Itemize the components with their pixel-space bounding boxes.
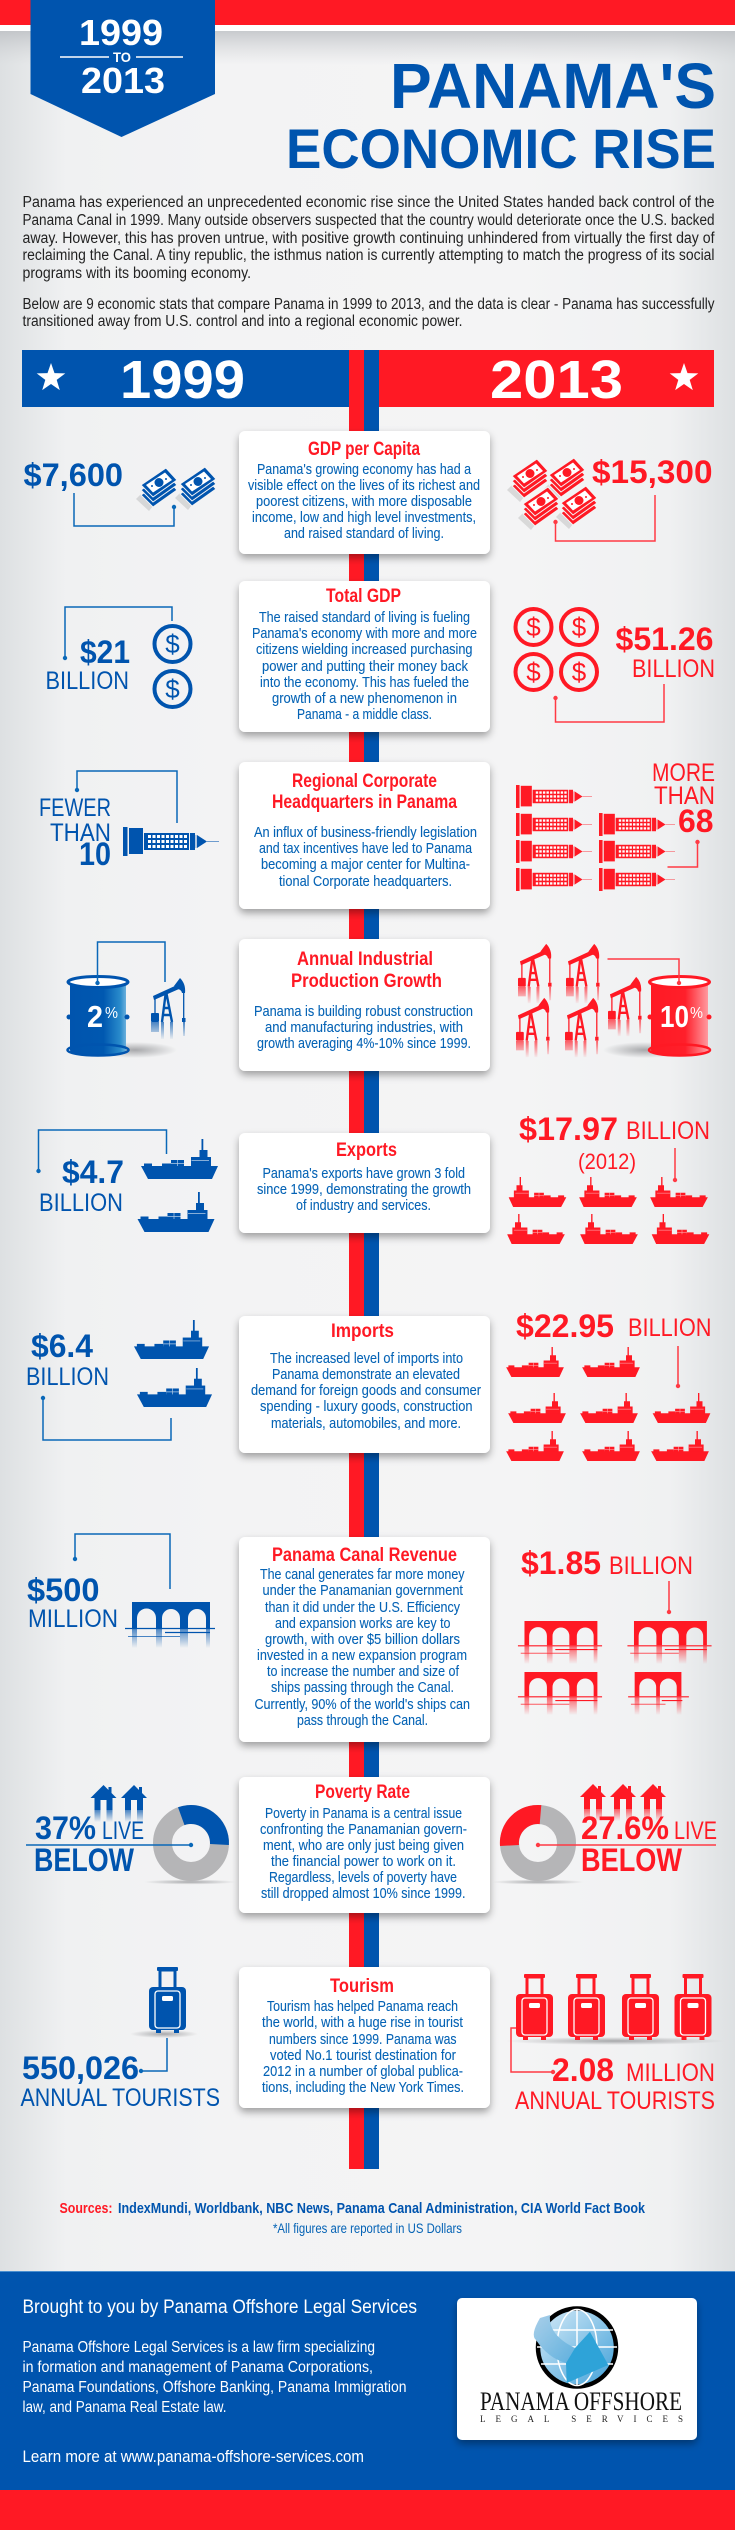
stat 1999: $21 billion: $21 xyxy=(80,634,130,670)
panel: total GDP: citizens wielding increased purchasing xyxy=(256,641,472,658)
stat 2013: $51.26 billion: $51.26 xyxy=(616,621,714,657)
panel: total GDP: Panama - a middle class. xyxy=(297,706,432,723)
row: regional corporate headquarters xyxy=(39,759,715,909)
panel: annual industrial production growth: Panama is building robust construction xyxy=(254,1003,473,1020)
panel: exports: Panama's exports have grown 3 fold xyxy=(262,1165,465,1182)
stat 2013: $17.97 billion: $17.97 xyxy=(519,1111,618,1147)
row: poverty rate xyxy=(26,1777,717,1913)
panel: imports xyxy=(239,1316,490,1453)
panel: poverty rate: confronting the Panamanian govern- xyxy=(260,1821,467,1838)
sources xyxy=(60,2200,646,2236)
stat 1999: $6.4 billion: BILLION xyxy=(26,1363,109,1391)
panel: Panama Canal revenue: to increase the number and size of xyxy=(267,1663,460,1680)
panel: total GDP: into the economy. This has fueled the xyxy=(260,674,469,691)
panel: regional corporate headquarters: An influx of business-friendly legislation xyxy=(254,824,477,841)
panel: regional corporate headquarters: Regional Corporate xyxy=(292,771,437,792)
panel: Panama Canal revenue xyxy=(239,1537,490,1742)
stat 1999: 550,026 annual tourists: ANNUAL TOURISTS xyxy=(20,2084,220,2112)
panel: total GDP: The raised standard of living is fueling xyxy=(259,609,470,626)
panel: annual industrial production growth xyxy=(239,939,490,1071)
footer description: Panama Offshore Legal Services is a law firm specializing xyxy=(22,2339,375,2356)
stat 2013: $22.95 billion: BILLION xyxy=(628,1314,712,1342)
stat 2013: 2.08 million annual tourists: MILLION xyxy=(626,2059,715,2087)
stat 2013: $17.97 billion: BILLION xyxy=(626,1117,710,1145)
stat 2013: more than 68: 68 xyxy=(678,803,714,839)
panel: poverty rate xyxy=(239,1777,490,1913)
row: imports xyxy=(26,1308,712,1461)
stat 2013: $15,300: $15,300 xyxy=(592,454,712,490)
title: ECONOMIC RISE xyxy=(286,117,716,180)
icon: globe with arrow xyxy=(534,2308,617,2386)
sources: *All figures are reported in US Dollars xyxy=(273,2221,462,2236)
panel: GDP per capita xyxy=(239,431,490,554)
date ribbon: 1999 to 2013: 2013 xyxy=(81,60,165,101)
panel: annual industrial production growth: growth averaging 4%-10% since 1999. xyxy=(257,1035,471,1052)
panel: total GDP: growth of a new phenomenon in xyxy=(272,690,457,707)
panel: tourism: voted No.1 tourist destination for xyxy=(270,2047,456,2064)
panel: poverty rate: Poverty in Panama is a central issue xyxy=(265,1805,462,1822)
panel: exports: since 1999, demonstrating the growth xyxy=(257,1181,471,1198)
panel: Panama Canal revenue: Panama Canal Revenue xyxy=(272,1545,457,1566)
date ribbon: 1999 to 2013 xyxy=(30,0,215,137)
stat 2013: $51.26 billion: $ xyxy=(526,612,541,642)
stat 2013: more than 68 xyxy=(516,759,715,891)
stat 1999: $21 billion: $ xyxy=(165,629,180,659)
stat 1999: 2 percent: % xyxy=(105,1005,118,1022)
stat 2013: more than 68: MORE xyxy=(652,759,715,787)
logo card: PANAMA OFFSHORE xyxy=(480,2387,682,2416)
date ribbon: 1999 to 2013: TO xyxy=(113,49,131,65)
panel: annual industrial production growth: and manufacturing industries, with xyxy=(265,1019,463,1036)
footer description: law, and Panama Real Estate law. xyxy=(22,2399,226,2416)
stat 1999: 37 percent live below: 37% xyxy=(35,1810,96,1846)
panel: Panama Canal revenue: invested in a new expansion program xyxy=(257,1647,467,1664)
panel: tourism: Tourism xyxy=(330,1976,394,1997)
stat 2013: 27.6 percent live below xyxy=(492,1784,717,1884)
panel: total GDP: power and putting their money back xyxy=(262,658,468,675)
panel: tourism: tions, including the New York Times. xyxy=(262,2079,464,2096)
panel: Panama Canal revenue: growth, with over $5 billion dollars xyxy=(265,1631,460,1648)
stat 2013: $51.26 billion: $ xyxy=(526,657,541,687)
stat 1999: $500 million: MILLION xyxy=(28,1605,118,1633)
panel: imports: spending - luxury goods, construction xyxy=(260,1398,472,1415)
stat 1999: 550,026 annual tourists xyxy=(20,1967,220,2112)
stat 1999: $7,600: $7,600 xyxy=(24,457,123,493)
panel: tourism: Tourism has helped Panama reach xyxy=(267,1998,458,2015)
panel: poverty rate: the financial power to work on it. xyxy=(271,1853,456,1870)
stat 1999: $500 million xyxy=(27,1534,215,1648)
panel: regional corporate headquarters xyxy=(239,762,490,909)
footer description xyxy=(22,2339,406,2416)
panel: Panama Canal revenue: and expansion works are key to xyxy=(275,1615,450,1632)
top red band xyxy=(0,0,735,31)
logo card xyxy=(457,2298,697,2440)
panel: tourism: the world, with a huge rise in tourist xyxy=(262,2014,464,2031)
sources: Sources: xyxy=(60,2200,112,2217)
panel: Panama Canal revenue: than it did under the U.S. Efficiency xyxy=(265,1599,460,1616)
panel: regional corporate headquarters: and tax incentives have led to Panama xyxy=(259,840,473,857)
stat 1999: $4.7 billion xyxy=(36,1130,218,1232)
panel: tourism xyxy=(239,1967,490,2108)
panel: Panama Canal revenue: under the Panamanian government xyxy=(262,1582,464,1599)
panel: Panama Canal revenue: ships passing through the Canal. xyxy=(271,1679,454,1696)
sources: IndexMundi, Worldbank, NBC News, Panama Canal Administration, CIA World Fact Book xyxy=(118,2200,646,2217)
row: annual industrial production growth xyxy=(66,939,712,1071)
bottom red band xyxy=(0,2490,735,2530)
panel: GDP per capita: income, low and high level investments, xyxy=(252,509,476,526)
stat 1999: $21 billion: BILLION xyxy=(46,667,129,695)
stat 1999: $6.4 billion: $6.4 xyxy=(31,1328,93,1364)
panel: imports: materials, automobiles, and more. xyxy=(271,1415,461,1432)
panel: annual industrial production growth: Production Growth xyxy=(291,971,442,992)
stat 2013: 2.08 million annual tourists xyxy=(505,1974,725,2115)
stat 1999: fewer than 10: 10 xyxy=(79,836,111,872)
year header bar: 1999 xyxy=(120,350,245,410)
row: tourism xyxy=(20,1967,725,2115)
panel: exports: of industry and services. xyxy=(296,1197,431,1214)
stat 1999: 37 percent live below xyxy=(26,1785,236,1884)
footer description: Panama Foundations, Offshore Banking, Panama Immigration xyxy=(22,2379,406,2396)
panel: exports xyxy=(239,1133,490,1233)
stat 2013: $51.26 billion: $ xyxy=(572,657,587,687)
intro text xyxy=(22,194,715,330)
panel: imports: demand for foreign goods and consumer xyxy=(251,1382,481,1399)
panel: Panama Canal revenue: Currently, 90% of the world's ships can xyxy=(254,1696,470,1713)
row: exports xyxy=(36,1111,710,1244)
stat 1999: $500 million: $500 xyxy=(27,1572,100,1608)
panel: Panama Canal revenue: pass through the Canal. xyxy=(297,1712,428,1729)
stat 1999: $7,600 xyxy=(24,457,216,526)
panel: GDP per capita: Panama's growing economy has had a xyxy=(257,461,472,478)
logo card: LEGAL SERVICES xyxy=(480,2414,683,2424)
row: total GDP xyxy=(46,581,715,732)
row: GDP per capita xyxy=(24,431,712,554)
panel: regional corporate headquarters: Headquarters in Panama xyxy=(272,792,457,813)
panel: poverty rate: ment, who are only just being given xyxy=(263,1837,464,1854)
stat 2013: 2.08 million annual tourists: 2.08 xyxy=(552,2052,614,2088)
stat 2013: $1.85 billion: $1.85 xyxy=(521,1545,601,1581)
panel: imports: Imports xyxy=(331,1321,394,1342)
stat 1999: 550,026 annual tourists: 550,026 xyxy=(22,2050,139,2086)
stat 1999: fewer than 10: FEWER xyxy=(39,794,111,822)
panel: Panama Canal revenue: The canal generates far more money xyxy=(260,1566,465,1583)
central timeline stripe xyxy=(349,350,379,2169)
stat 2013: $51.26 billion: $ xyxy=(572,612,587,642)
stat 2013: $17.97 billion: (2012) xyxy=(578,1149,636,1174)
footer link: Learn more at www.panama-offshore-services.com xyxy=(22,2447,364,2466)
row: Panama Canal revenue xyxy=(27,1534,712,1742)
stat 2013: 27.6 percent live below: BELOW xyxy=(581,1842,683,1878)
stat 2013: $1.85 billion: BILLION xyxy=(609,1552,693,1580)
stat 2013: 10 percent: % xyxy=(690,1005,703,1022)
footer panel xyxy=(0,2271,735,2490)
footer description: in formation and management of Panama Corporations, xyxy=(22,2359,373,2376)
panel: tourism: 2012 in a number of global publica- xyxy=(263,2063,463,2080)
panel: tourism: numbers since 1999. Panama was xyxy=(269,2031,456,2048)
year header bar xyxy=(22,350,714,410)
panel: total GDP: Total GDP xyxy=(326,586,401,607)
stat 2013: 27.6 percent live below: LIVE xyxy=(674,1817,717,1845)
panel: imports: Panama demonstrate an elevated xyxy=(272,1366,460,1383)
footer heading: Brought to you by Panama Offshore Legal Services xyxy=(22,2297,417,2318)
panel: regional corporate headquarters: tional Corporate headquarters. xyxy=(279,873,452,890)
stat 2013: 10 percent xyxy=(516,944,712,1058)
stat 1999: fewer than 10 xyxy=(39,771,219,872)
stat 1999: 37 percent live below: BELOW xyxy=(34,1842,135,1878)
stat 1999: $6.4 billion xyxy=(26,1320,212,1440)
title: PANAMA'S xyxy=(390,50,716,122)
stat 2013: 27.6 percent live below: 27.6% xyxy=(581,1810,669,1846)
stat 1999: $21 billion xyxy=(46,607,190,707)
panel: GDP per capita: poorest citizens, with more disposable xyxy=(256,493,472,510)
stat 2013: $22.95 billion xyxy=(506,1308,712,1461)
panel: total GDP: Panama's economy with more and more xyxy=(252,625,477,642)
panel: imports: The increased level of imports into xyxy=(270,1350,463,1367)
panel: GDP per capita: visible effect on the lives of its richest and xyxy=(248,477,480,494)
panel: exports: Exports xyxy=(336,1140,397,1161)
date ribbon: 1999 to 2013: 1999 xyxy=(79,12,163,53)
intro text: transitioned away from U.S. control and into a regional economic power. xyxy=(22,313,462,330)
stat 1999: fewer than 10: THAN xyxy=(50,819,111,847)
stat 1999: 2 percent: 2 xyxy=(87,999,103,1034)
panel: annual industrial production growth: Annual Industrial xyxy=(297,949,433,970)
stat 1999: $4.7 billion: $4.7 xyxy=(62,1154,124,1190)
year header bar: 2013 xyxy=(490,350,623,410)
intro text: programs with its booming economy. xyxy=(22,265,251,282)
panel: GDP per capita: and raised standard of living. xyxy=(284,525,444,542)
stat 2013: 10 percent: 10 xyxy=(660,999,689,1034)
panel: regional corporate headquarters: becoming a major center for Multina- xyxy=(261,856,470,873)
stat 2013: $22.95 billion: $22.95 xyxy=(516,1308,614,1344)
stat 2013: more than 68: THAN xyxy=(654,782,715,810)
stat 2013: $51.26 billion: BILLION xyxy=(632,655,715,683)
panel: GDP per capita: GDP per Capita xyxy=(308,439,420,460)
panel: total GDP xyxy=(239,581,490,732)
panel: poverty rate: Regardless, levels of poverty have xyxy=(269,1869,457,1886)
stat 2013: $51.26 billion xyxy=(516,609,715,722)
title xyxy=(286,50,716,180)
panel: poverty rate: Poverty Rate xyxy=(315,1782,410,1803)
stat 1999: 2 percent xyxy=(66,942,186,1058)
stat 2013: $17.97 billion xyxy=(507,1111,710,1244)
stat 1999: 37 percent live below: LIVE xyxy=(102,1817,144,1845)
stat 2013: $15,300 xyxy=(507,454,712,541)
stat 2013: $1.85 billion xyxy=(518,1545,712,1715)
panel: poverty rate: still dropped almost 10% since 1999. xyxy=(261,1885,466,1902)
stat 1999: $21 billion: $ xyxy=(165,674,180,704)
stat 1999: $4.7 billion: BILLION xyxy=(39,1189,123,1217)
